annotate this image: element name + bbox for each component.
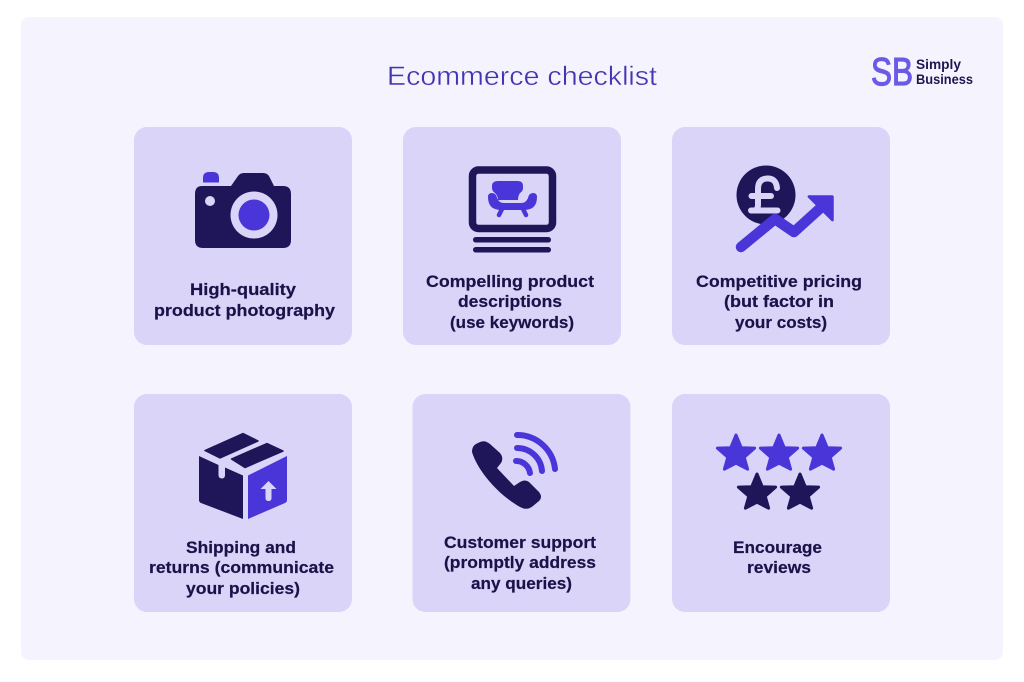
label: product descriptions: Compelling product: [426, 273, 595, 291]
logo: Simply Business: SB: [871, 51, 913, 94]
label: encourage reviews: reviews: [747, 559, 811, 577]
label: competitive pricing: [696, 273, 862, 332]
label: product photography: product photography: [154, 302, 336, 320]
label: customer support: (promptly address: [444, 554, 596, 572]
label: competitive pricing: your costs): [735, 314, 827, 332]
panel: shipping and returns: [134, 394, 352, 612]
label: competitive pricing: (but factor in: [724, 293, 834, 311]
icon: pound coin with rising arrow: [736, 166, 833, 247]
panel: encourage reviews: [672, 394, 890, 612]
panel: customer support: [412, 394, 630, 612]
label: product descriptions: [426, 273, 595, 332]
icon: parcel box: [199, 434, 287, 519]
logo: Simply Business: [871, 51, 973, 94]
label: product photography: High-quality: [190, 281, 297, 299]
label: customer support: any queries): [471, 575, 572, 593]
label: product descriptions: descriptions: [458, 293, 562, 311]
panel: product photography: [134, 127, 352, 345]
label: encourage reviews: Encourage: [733, 539, 822, 557]
icon: monitor with sofa: [472, 170, 552, 252]
label: product descriptions: (use keywords): [450, 314, 574, 332]
label: product photography: [154, 281, 336, 320]
panel: product descriptions: [403, 127, 621, 345]
label: shipping and returns: your policies): [186, 580, 300, 598]
label: customer support: [444, 534, 597, 593]
panel: competitive pricing: [672, 127, 890, 345]
logo: Simply Business: Simply: [916, 57, 961, 72]
label: customer support: Customer support: [444, 534, 597, 552]
label: competitive pricing: Competitive pricing: [696, 273, 862, 291]
label: encourage reviews: [733, 539, 822, 577]
label: shipping and returns: Shipping and: [186, 539, 296, 557]
label: shipping and returns: [149, 539, 334, 598]
logo: Simply Business: Business: [916, 72, 973, 87]
icon: telephone with signal: [472, 435, 555, 509]
icon: five stars: [717, 435, 841, 508]
icon: camera: [195, 172, 291, 248]
title: Ecommerce checklist: [387, 61, 658, 91]
label: shipping and returns: returns (communicate: [149, 559, 334, 577]
